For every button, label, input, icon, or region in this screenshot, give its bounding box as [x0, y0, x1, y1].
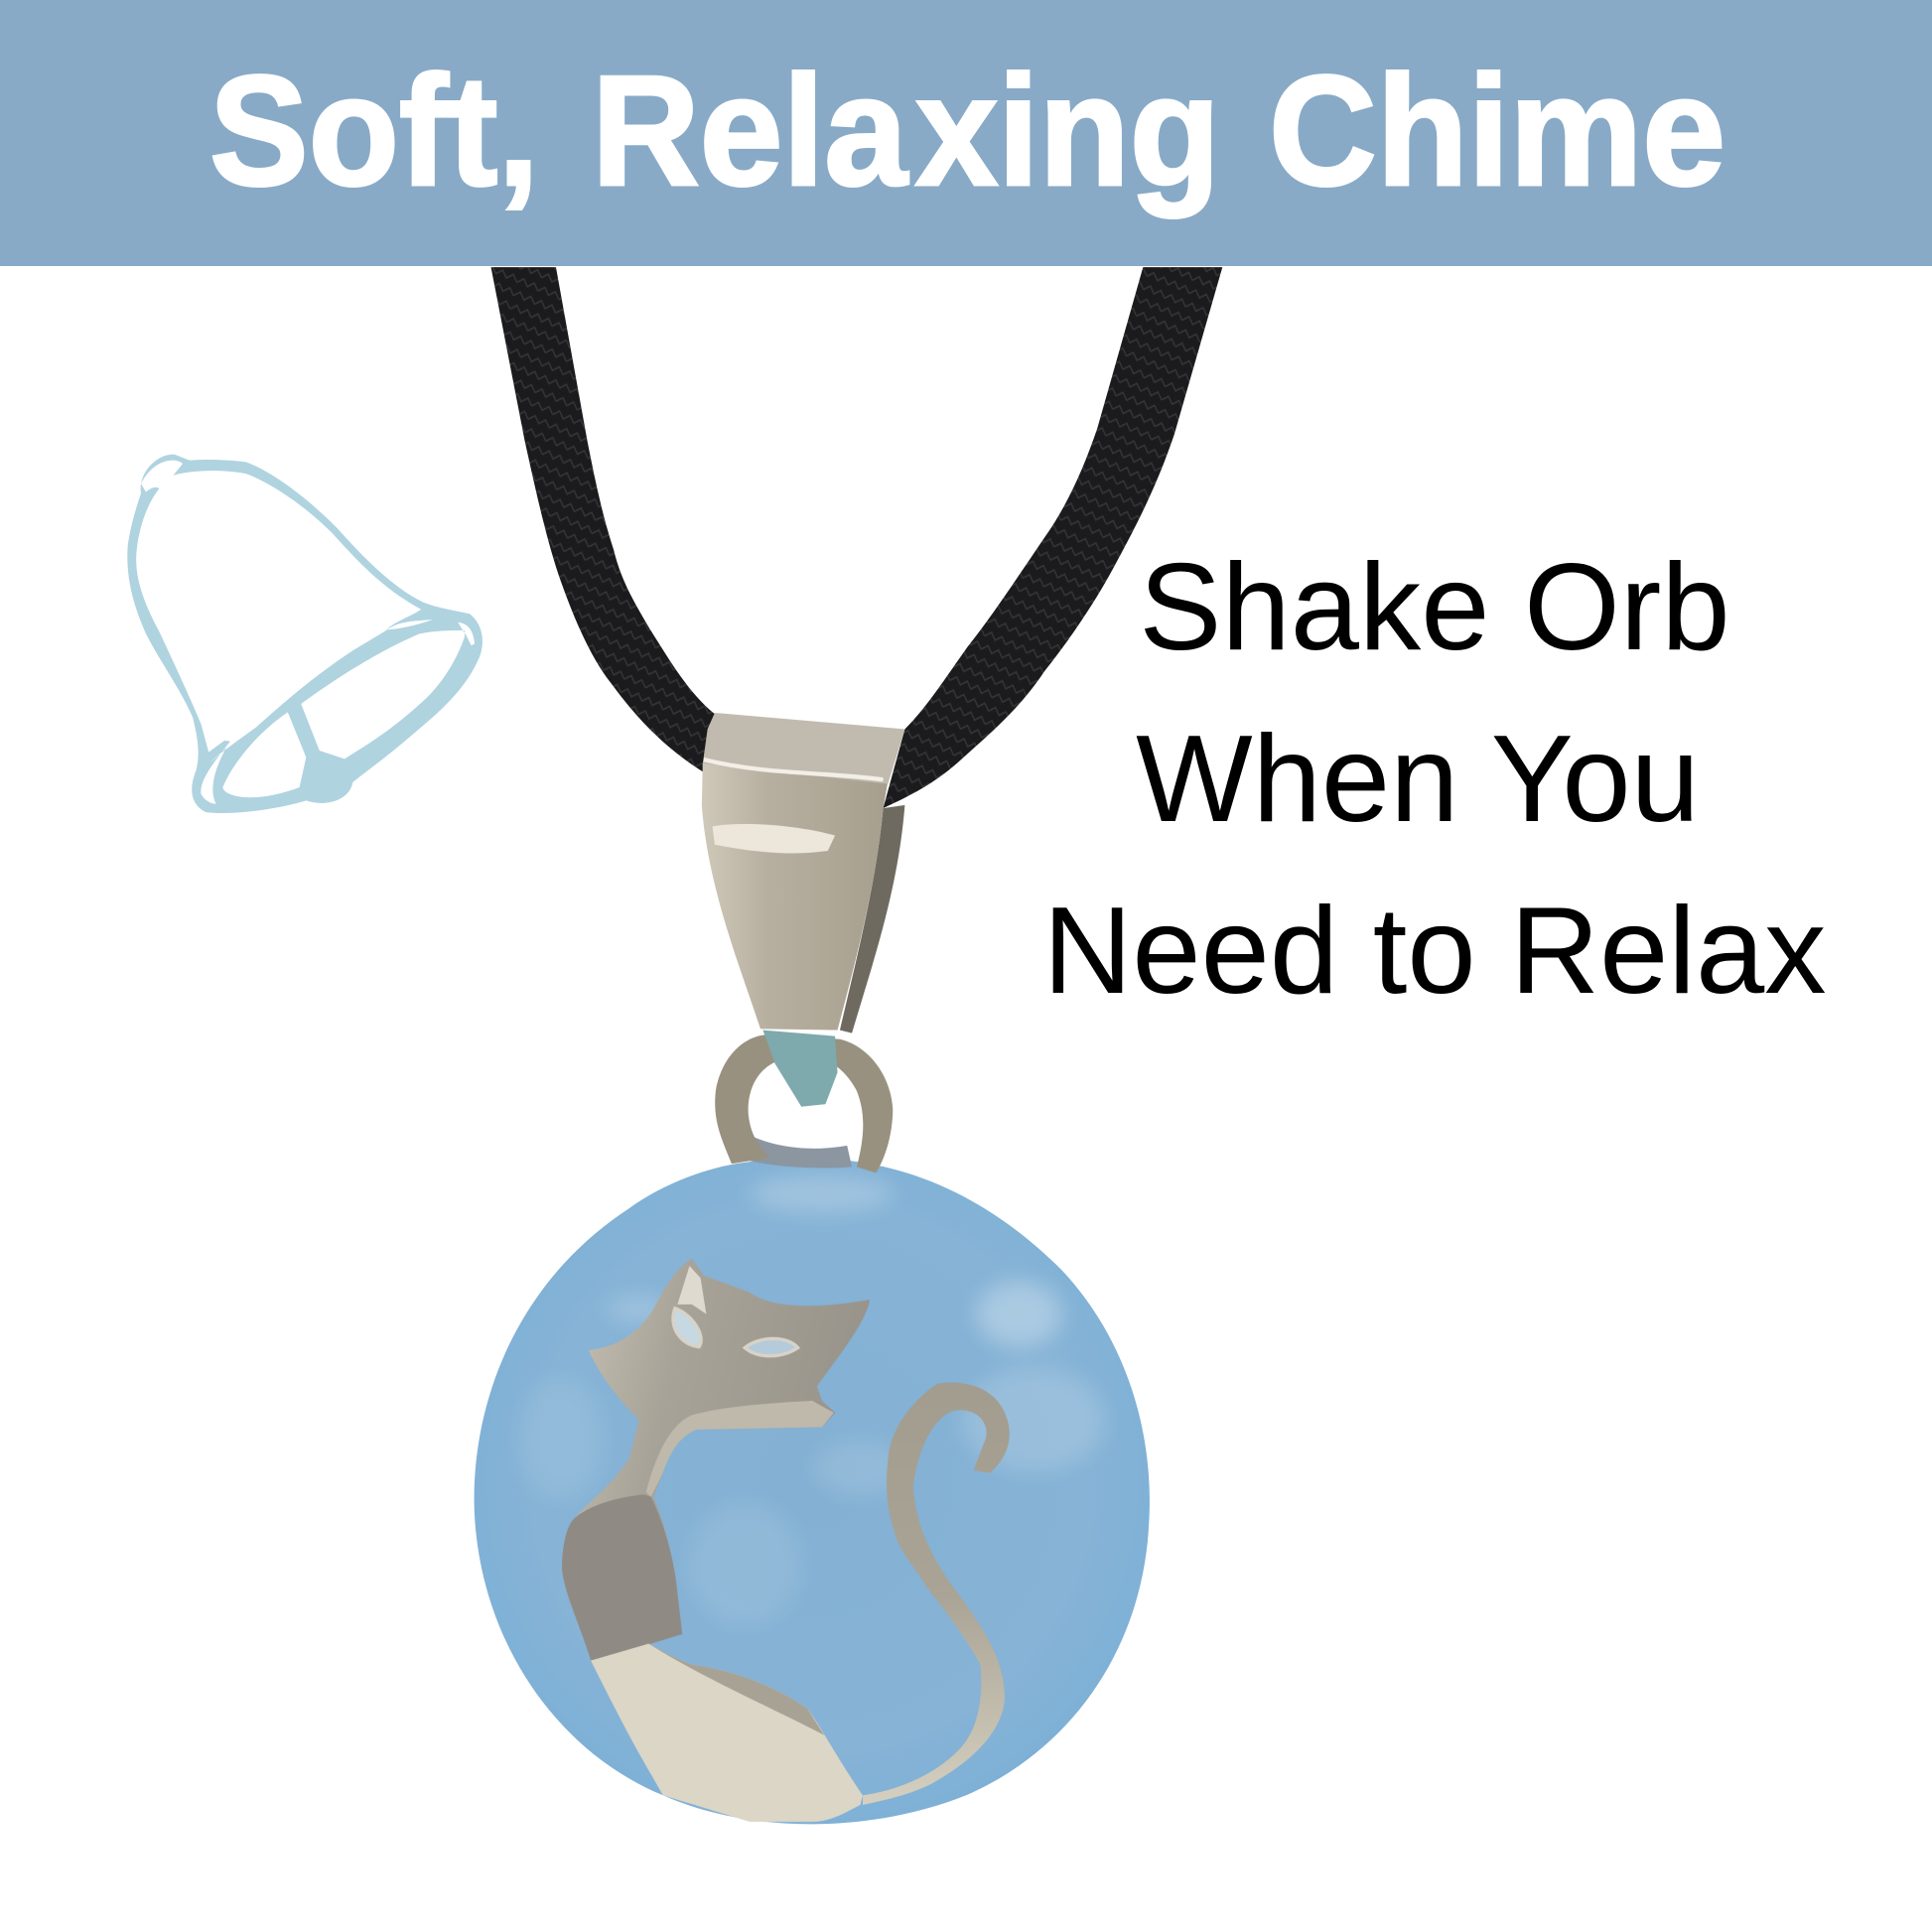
cat tail	[863, 1382, 1010, 1805]
instruction text: Need to Relax	[1043, 882, 1826, 1020]
cat eyes	[673, 1309, 798, 1356]
title: Chime	[1269, 44, 1725, 218]
pearl highlights	[518, 1174, 1106, 1627]
bell icon	[127, 455, 483, 813]
teal reflection at bail tip	[762, 1030, 838, 1107]
bail fold shine	[704, 759, 884, 779]
pendant hardware	[702, 713, 904, 1173]
title	[209, 44, 1725, 218]
cat head and chest	[562, 1259, 870, 1661]
orb sphere	[475, 1158, 1150, 1824]
cord necklace	[491, 267, 1222, 808]
cat chin highlight	[646, 1401, 834, 1497]
instruction text: When You	[1136, 710, 1700, 848]
cat silhouette	[562, 1259, 1010, 1822]
orb pendant	[475, 1158, 1150, 1824]
jump ring	[715, 1035, 893, 1173]
instruction text	[1043, 538, 1826, 1020]
title: xing	[915, 44, 1220, 218]
ring base band	[737, 1134, 852, 1168]
header banner	[0, 0, 1932, 266]
left cord strand	[491, 267, 715, 771]
cat lower body	[591, 1644, 863, 1822]
cat chest shade	[562, 1494, 682, 1661]
bail top fold	[703, 713, 904, 784]
title: Rela	[592, 44, 908, 218]
right cord strand	[884, 267, 1222, 808]
title: Soft,	[209, 44, 539, 218]
bail front	[702, 762, 888, 1030]
bail highlight	[713, 824, 835, 853]
bail back	[840, 805, 904, 1034]
instruction text: Shake Orb	[1139, 538, 1730, 676]
cat back shading	[648, 1644, 824, 1735]
cat ear shine	[677, 1266, 706, 1314]
